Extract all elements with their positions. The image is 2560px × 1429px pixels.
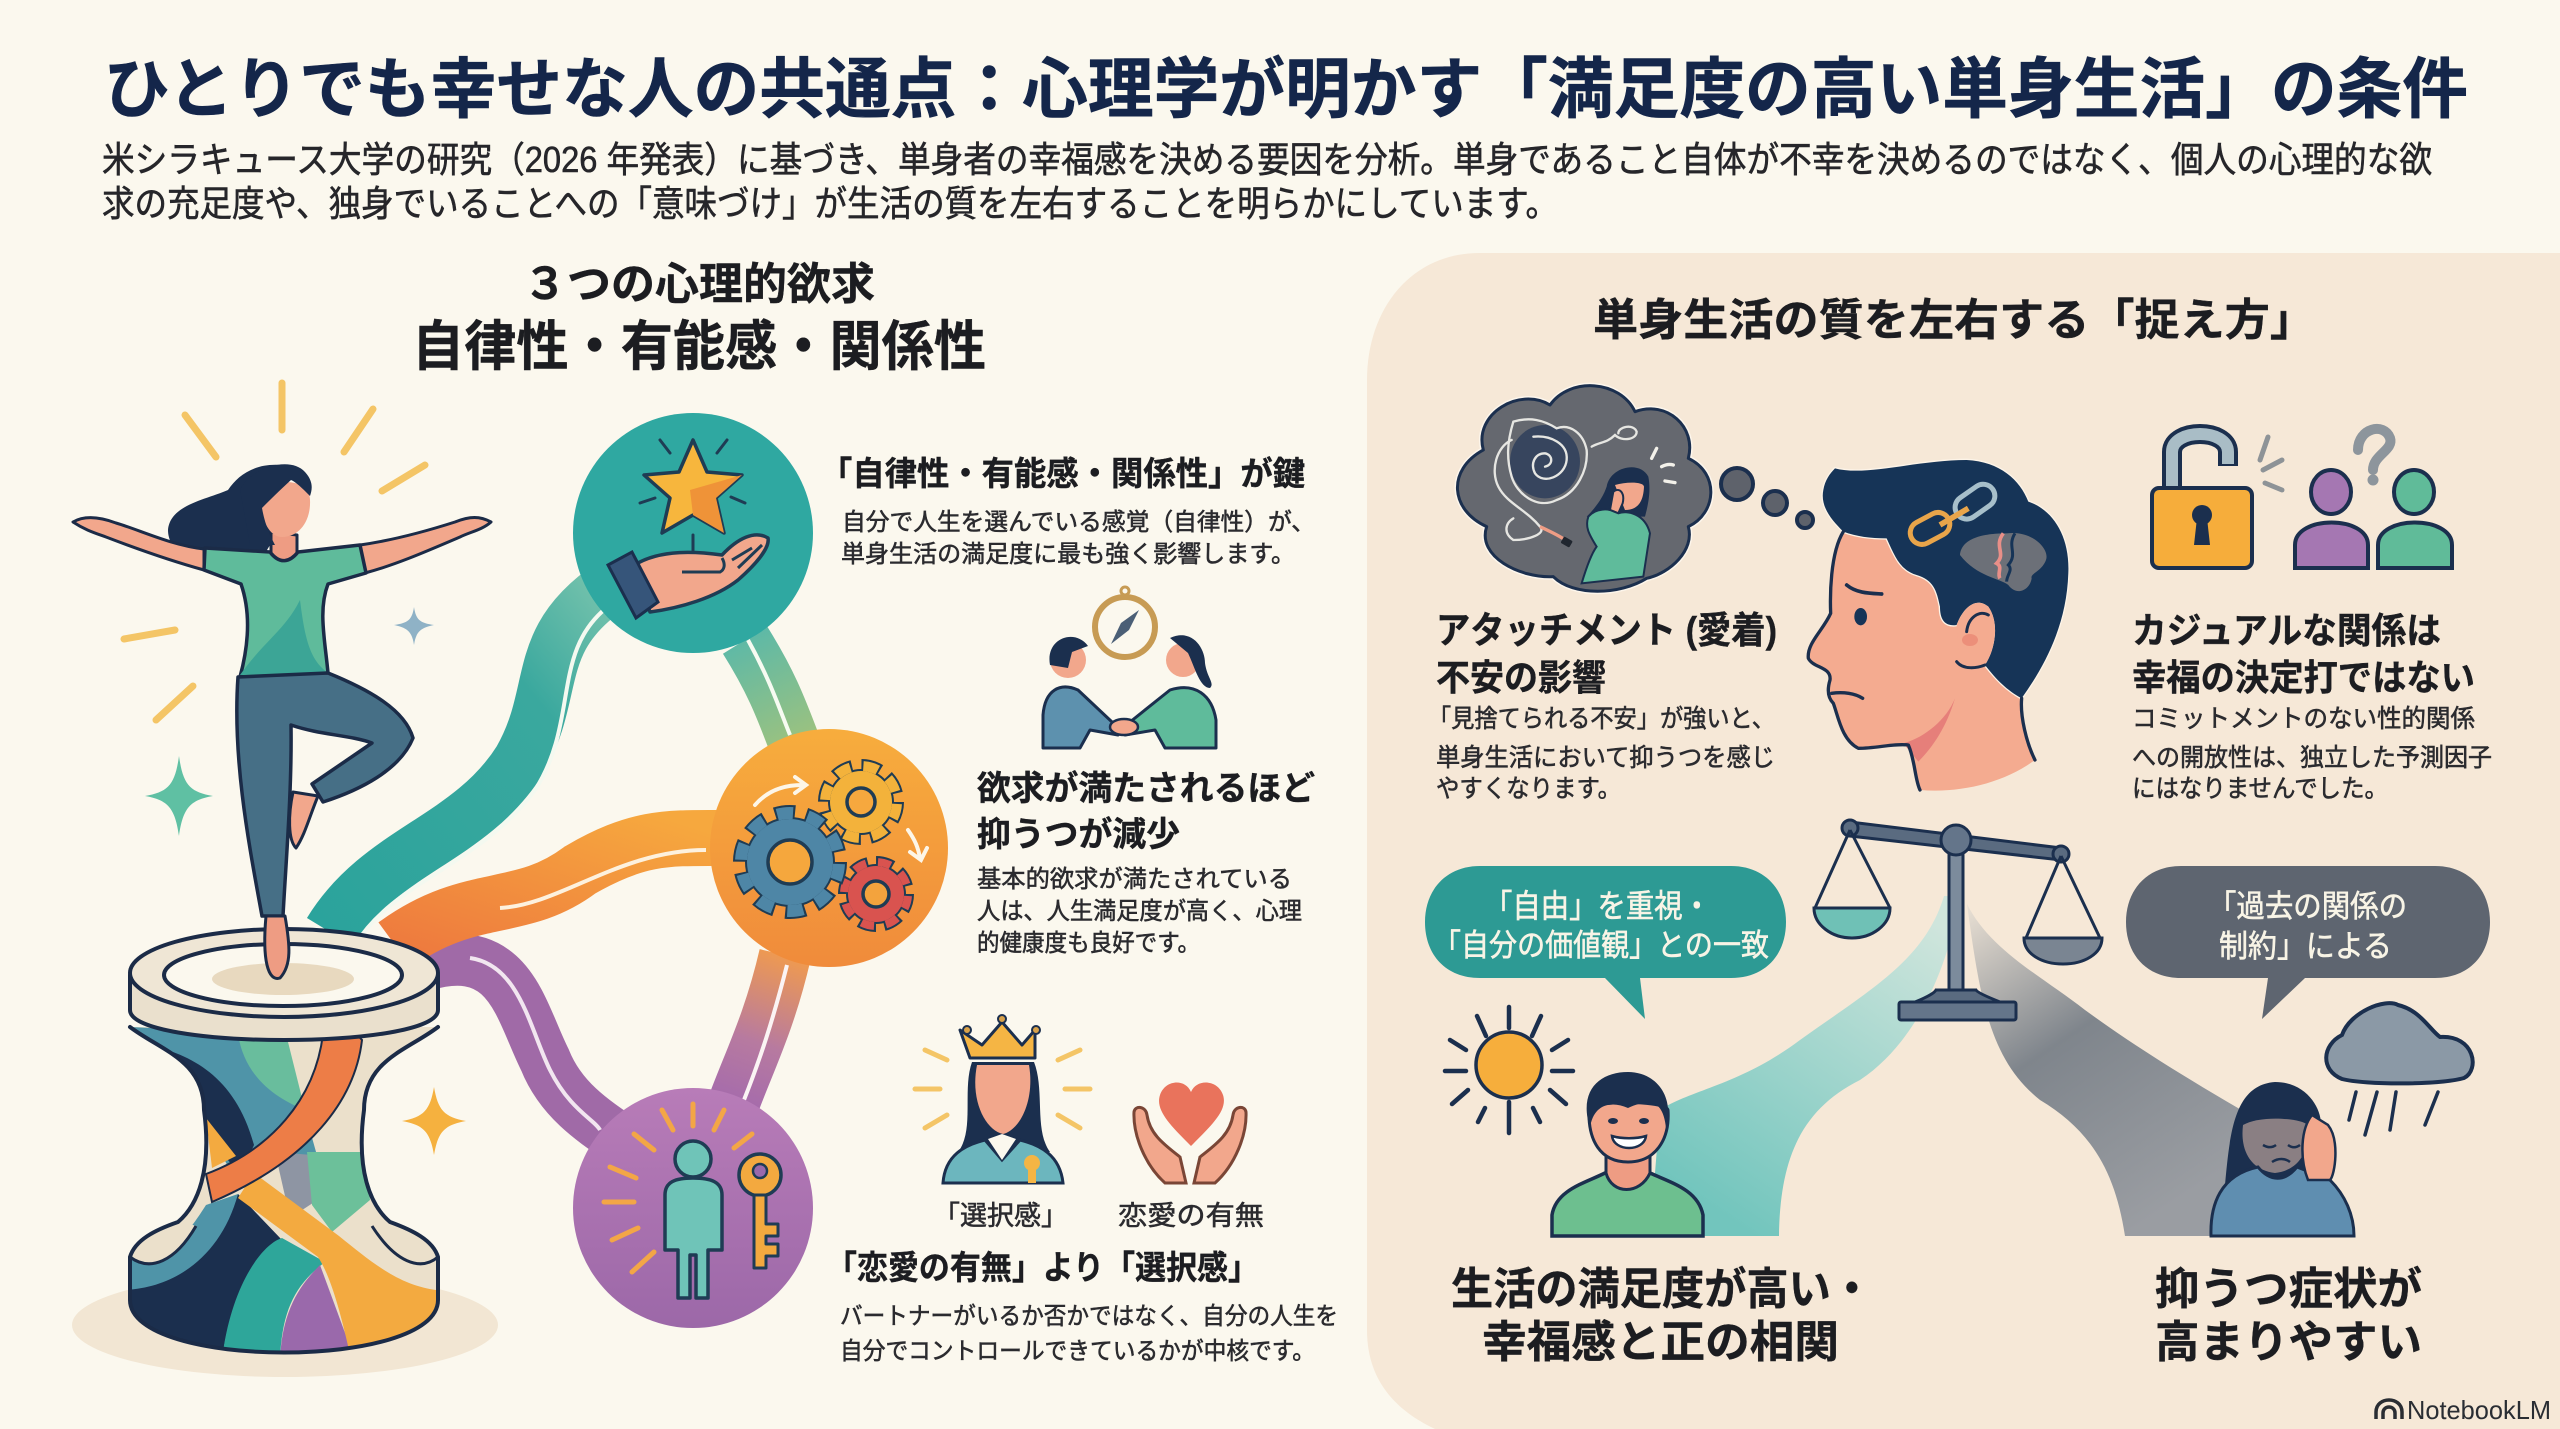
panel background	[1367, 253, 2560, 1429]
intro text: 求の充足度や、独身でいることへの「意味づけ」が生活の質を左右することを明らかにしています。	[102, 183, 1558, 224]
text block: attachment anxiety: 不安の影響	[1436, 657, 1606, 698]
icon: sad woman	[2211, 1082, 2354, 1236]
intro text	[102, 139, 2432, 224]
icon: sparkles	[145, 607, 466, 1155]
text block: casual relationships: にはなりませんでした。	[2132, 775, 2388, 803]
gray path from scale	[1967, 904, 2250, 1236]
right heading: 単身生活の質を左右する「捉え方」	[1593, 296, 2315, 345]
text block: choice over romance	[826, 1201, 1338, 1365]
text block: choice over romance: 自分でコントロールできているかが中核です。	[840, 1338, 1315, 1365]
text block: casual relationships: 幸福の決定打ではない	[2132, 657, 2475, 698]
text block: choice over romance: 恋愛の有無	[1118, 1201, 1264, 1231]
icon: person	[665, 1141, 722, 1298]
left heading: 自律性・有能感・関係性	[412, 317, 986, 377]
panel: three psychological needs	[72, 260, 1338, 1377]
text block: attachment anxiety: アタッチメント (愛着)	[1436, 610, 1777, 651]
outcome: depressive symptoms: 抑うつ症状が	[2155, 1265, 2422, 1314]
icon: balance scale	[1814, 820, 2102, 1020]
icon: gold gear	[825, 766, 897, 838]
outcome: high satisfaction: 幸福感と正の相関	[1482, 1318, 1839, 1367]
speech bubble: freedom: 「自分の価値観」との一致	[1433, 928, 1769, 963]
text block: depression decreases	[977, 769, 1315, 957]
text block: key needs	[820, 455, 1315, 568]
icon: rain cloud	[2326, 1003, 2473, 1135]
icon: red gear	[844, 862, 908, 926]
speech bubble: past constraints: 「過去の関係の	[2208, 889, 2407, 924]
text block: depression decreases: 的健康度も良好です。	[977, 930, 1200, 957]
outcome: high satisfaction	[1451, 1265, 1873, 1367]
outcome: depressive symptoms	[2155, 1265, 2422, 1367]
icon: happy man	[1552, 1072, 1703, 1236]
text block: casual relationships	[2132, 610, 2492, 803]
speech bubble: past constraints	[2126, 866, 2490, 1019]
icon: two people with question mark	[2295, 429, 2452, 568]
icon: open hand	[608, 535, 768, 618]
title: ひとりでも幸せな人の共通点：心理学が明かす「満足度の高い単身生活」の条件	[104, 52, 2468, 126]
text block: attachment anxiety: 「見捨てられる不安」が強いと、	[1428, 705, 1775, 733]
icon: pedestal	[72, 929, 498, 1377]
icon: rays	[604, 1104, 752, 1272]
icon: balancing woman	[73, 464, 491, 978]
outcome: depressive symptoms: 高まりやすい	[2155, 1318, 2422, 1367]
logo: NotebookLM: NotebookLM	[2407, 1395, 2551, 1425]
panel: framing	[1367, 253, 2560, 1429]
icon: anxious thought cloud	[1457, 386, 1711, 591]
text block: depression decreases: 人は、人生満足度が高く、心理	[977, 898, 1302, 925]
text block: key needs: 自分で人生を選んでいる感覚（自律性）が、	[842, 509, 1315, 536]
text block: choice over romance: 「選択感」	[933, 1201, 1068, 1231]
icon: star	[640, 440, 745, 552]
text block: depression decreases: 抑うつが減少	[977, 815, 1180, 854]
icon: thought dots	[1721, 468, 1813, 528]
sparkle rays	[124, 383, 425, 720]
circle: autonomy (star and hand)	[573, 413, 813, 653]
text block: depression decreases: 欲求が満たされるほど	[977, 769, 1315, 808]
text block: choice over romance: 「恋愛の有無」より「選択感」	[826, 1249, 1259, 1286]
ribbons to the circles	[330, 585, 795, 1160]
text block: attachment anxiety: やすくなります。	[1436, 775, 1621, 803]
text block: attachment anxiety: 単身生活において抑うつを感じ	[1436, 744, 1775, 772]
circle: competence (gears)	[710, 729, 948, 967]
text block: casual relationships: カジュアルな関係は	[2132, 610, 2441, 651]
icon: hands holding heart	[1134, 1083, 1246, 1183]
icon: sun	[1445, 1007, 1573, 1133]
icon: troubled head profile	[1808, 460, 2068, 791]
speech bubble: past constraints: 制約」による	[2219, 929, 2392, 964]
speech bubble: freedom	[1425, 866, 1786, 1019]
icon: handshake with compass	[1043, 587, 1216, 748]
text block: choice over romance: バートナーがいるか否かではなく、自分の人生を	[840, 1303, 1338, 1330]
text block: depression decreases: 基本的欲求が満たされている	[977, 866, 1292, 893]
icon: crowned woman	[915, 1015, 1090, 1183]
text block: casual relationships: コミットメントのない性的関係	[2132, 705, 2475, 733]
left heading	[412, 260, 986, 377]
icon: unlocked padlock	[2152, 434, 2282, 568]
icon: blue gear	[741, 813, 839, 911]
circle: relatedness (person and key)	[573, 1088, 813, 1328]
left heading: ３つの心理的欲求	[523, 260, 875, 309]
teal path from scale	[1650, 896, 1960, 1236]
text block: casual relationships: への開放性は、独立した予測因子	[2132, 744, 2492, 772]
text block: attachment anxiety	[1428, 610, 1777, 803]
icon: rotation arrows	[755, 777, 927, 860]
speech bubble: freedom: 「自由」を重視・	[1484, 888, 1711, 924]
text block: key needs: 単身生活の満足度に最も強く影響します。	[841, 541, 1295, 568]
outcome: high satisfaction: 生活の満足度が高い・	[1451, 1265, 1873, 1314]
text block: key needs: 「自律性・有能感・関係性」が鍵	[820, 455, 1305, 492]
icon: key	[739, 1154, 781, 1268]
